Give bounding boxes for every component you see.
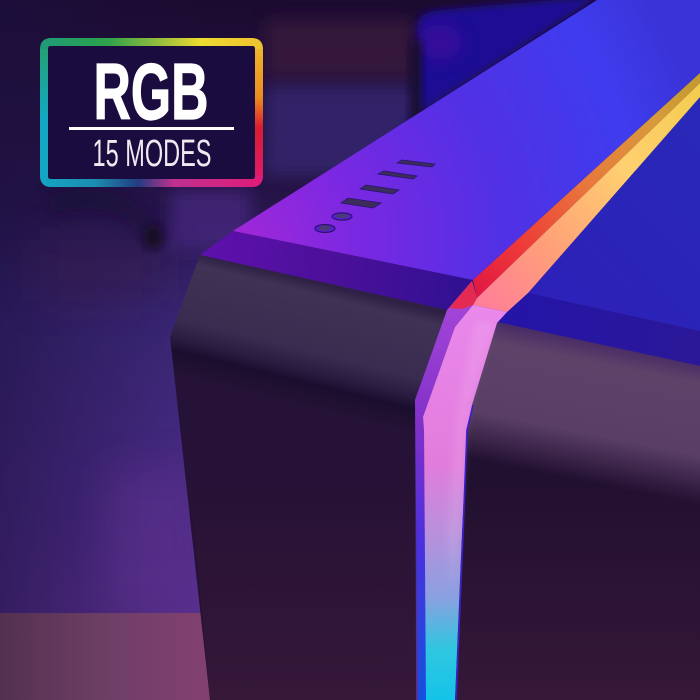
front panel right — [452, 322, 700, 700]
badge title: RGB — [94, 47, 208, 136]
case top panel right of light strip — [528, 97, 700, 331]
badge divider — [69, 127, 234, 130]
front IO ports — [341, 160, 435, 208]
top lip right — [497, 293, 700, 366]
front panel left — [170, 255, 447, 700]
badge frame — [43, 42, 259, 183]
power and reset buttons — [315, 213, 352, 232]
RGB light strip — [415, 73, 700, 700]
case top panel left of light strip — [233, 0, 700, 280]
blurred chair behind case — [392, 0, 600, 130]
badge subtitle: 15 MODES — [92, 133, 212, 175]
RGB badge — [43, 42, 259, 183]
top lip left — [200, 231, 473, 310]
